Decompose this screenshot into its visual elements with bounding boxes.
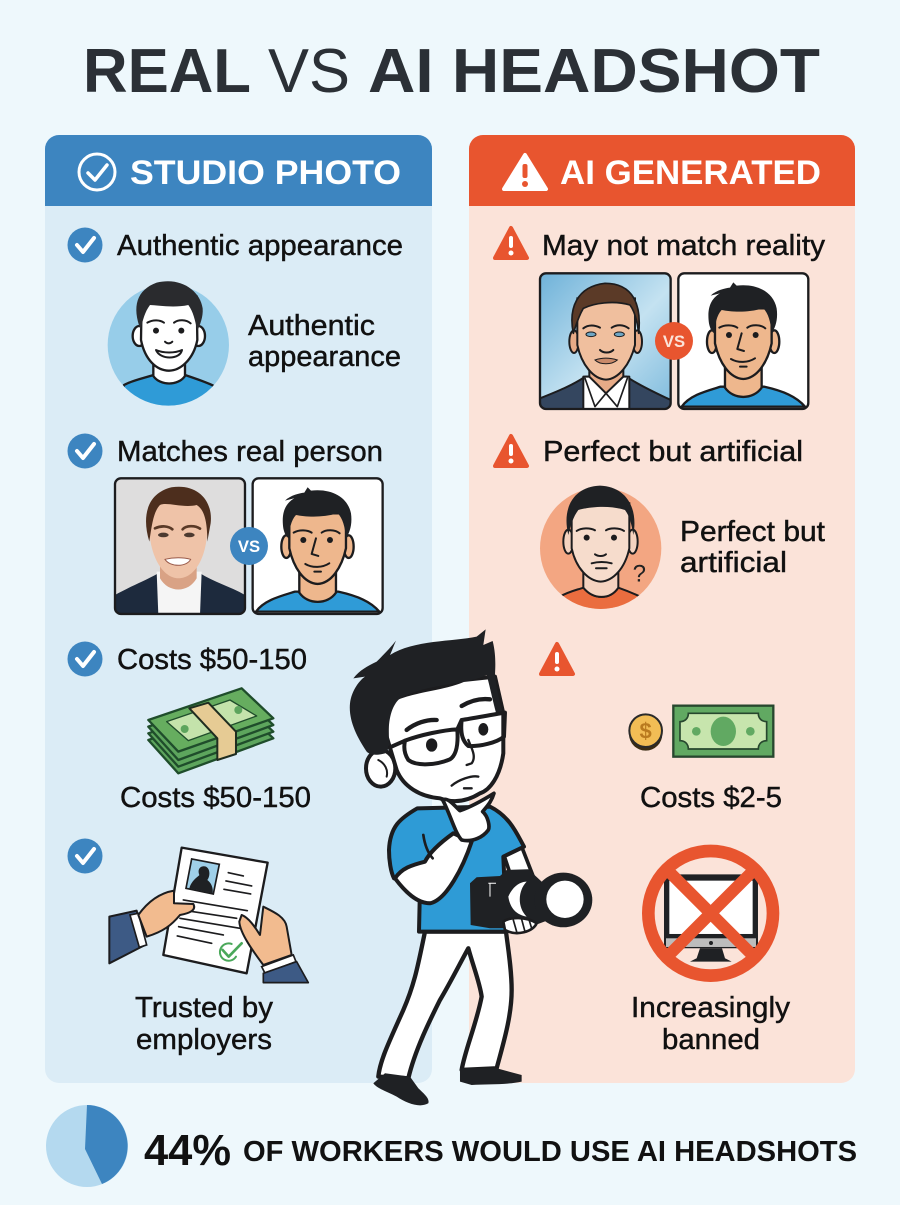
title: AI HEADSHOT	[368, 37, 820, 106]
text: costs: Costs $50-150	[120, 782, 311, 814]
text: authentic appearance	[248, 310, 401, 373]
hand on chin	[443, 793, 494, 841]
panel: ai generated	[469, 135, 855, 1083]
text: perfect but artificial	[680, 516, 825, 579]
caption: 44%	[144, 1126, 231, 1175]
caption: OF WORKERS WOULD USE AI HEADSHOTS	[243, 1136, 857, 1168]
text: costs: Costs $2-5	[640, 782, 782, 814]
pie chart: 44 percent	[46, 1105, 128, 1187]
icon: artificial face in circle: ?	[633, 561, 646, 588]
item: authentic appearance heading: Authentic appearance	[117, 230, 403, 262]
title: VS	[268, 37, 350, 106]
header: ai generated: AI GENERATED	[560, 154, 821, 192]
text: authentic appearance: Authentic	[248, 310, 375, 342]
header: studio photo	[45, 135, 432, 206]
text: perfect but artificial: artificial	[680, 547, 787, 579]
title: REAL	[83, 37, 251, 106]
icon: smiling person in circle	[108, 281, 229, 413]
character: man with camera	[350, 629, 592, 1105]
text: increasingly banned	[631, 992, 791, 1056]
text: increasingly banned: Increasingly	[631, 992, 791, 1024]
glasses and face details	[378, 699, 505, 788]
item: perfect but artificial heading: Perfect but artificial	[543, 436, 803, 468]
text: increasingly banned: banned	[662, 1024, 760, 1056]
icon: resume held by hands	[109, 848, 308, 983]
camera	[470, 869, 592, 933]
caption	[144, 1126, 857, 1175]
icon: coin and banknote	[629, 706, 773, 757]
footer statistic	[46, 1105, 857, 1187]
badge: vs	[655, 322, 693, 360]
item: matches real person heading: Matches real person	[117, 436, 383, 468]
arm holding camera	[503, 847, 533, 883]
header: ai generated	[469, 135, 855, 206]
text: authentic appearance: appearance	[248, 341, 401, 373]
thinking arm	[395, 833, 472, 903]
text: trusted by employers	[135, 992, 273, 1056]
photo: ai portrait	[540, 273, 671, 412]
badge: vs: VS	[238, 537, 260, 556]
shoes	[373, 1068, 522, 1105]
icon: warning	[541, 644, 573, 674]
comparison: ai portrait vs cartoon	[540, 273, 808, 412]
icon: coin and banknote: $	[640, 718, 652, 743]
badge: vs: VS	[663, 332, 685, 351]
icon: banned monitor	[648, 851, 773, 976]
legs	[378, 932, 512, 1078]
cartoon: person	[678, 273, 808, 409]
text: perfect but artificial: Perfect but	[680, 516, 825, 548]
panel: studio photo	[45, 135, 432, 1083]
head	[387, 677, 503, 801]
title	[83, 37, 820, 106]
icon: artificial face in circle	[540, 486, 661, 615]
comparison: studio photo vs cartoon	[115, 478, 383, 617]
ear	[366, 750, 395, 787]
text: trusted by employers: Trusted by	[135, 992, 273, 1024]
hair	[350, 629, 503, 755]
shirt	[389, 807, 524, 932]
badge: vs	[230, 527, 268, 565]
item: may not match reality heading: May not match reality	[542, 230, 826, 262]
cartoon: person	[253, 478, 383, 614]
text: trusted by employers: employers	[136, 1024, 272, 1056]
photo: real man	[115, 478, 245, 617]
icon: check	[68, 838, 102, 874]
item: costs heading: Costs $50-150	[117, 644, 307, 676]
icon: stack of cash	[148, 688, 273, 773]
header: studio photo: STUDIO PHOTO	[130, 154, 401, 192]
